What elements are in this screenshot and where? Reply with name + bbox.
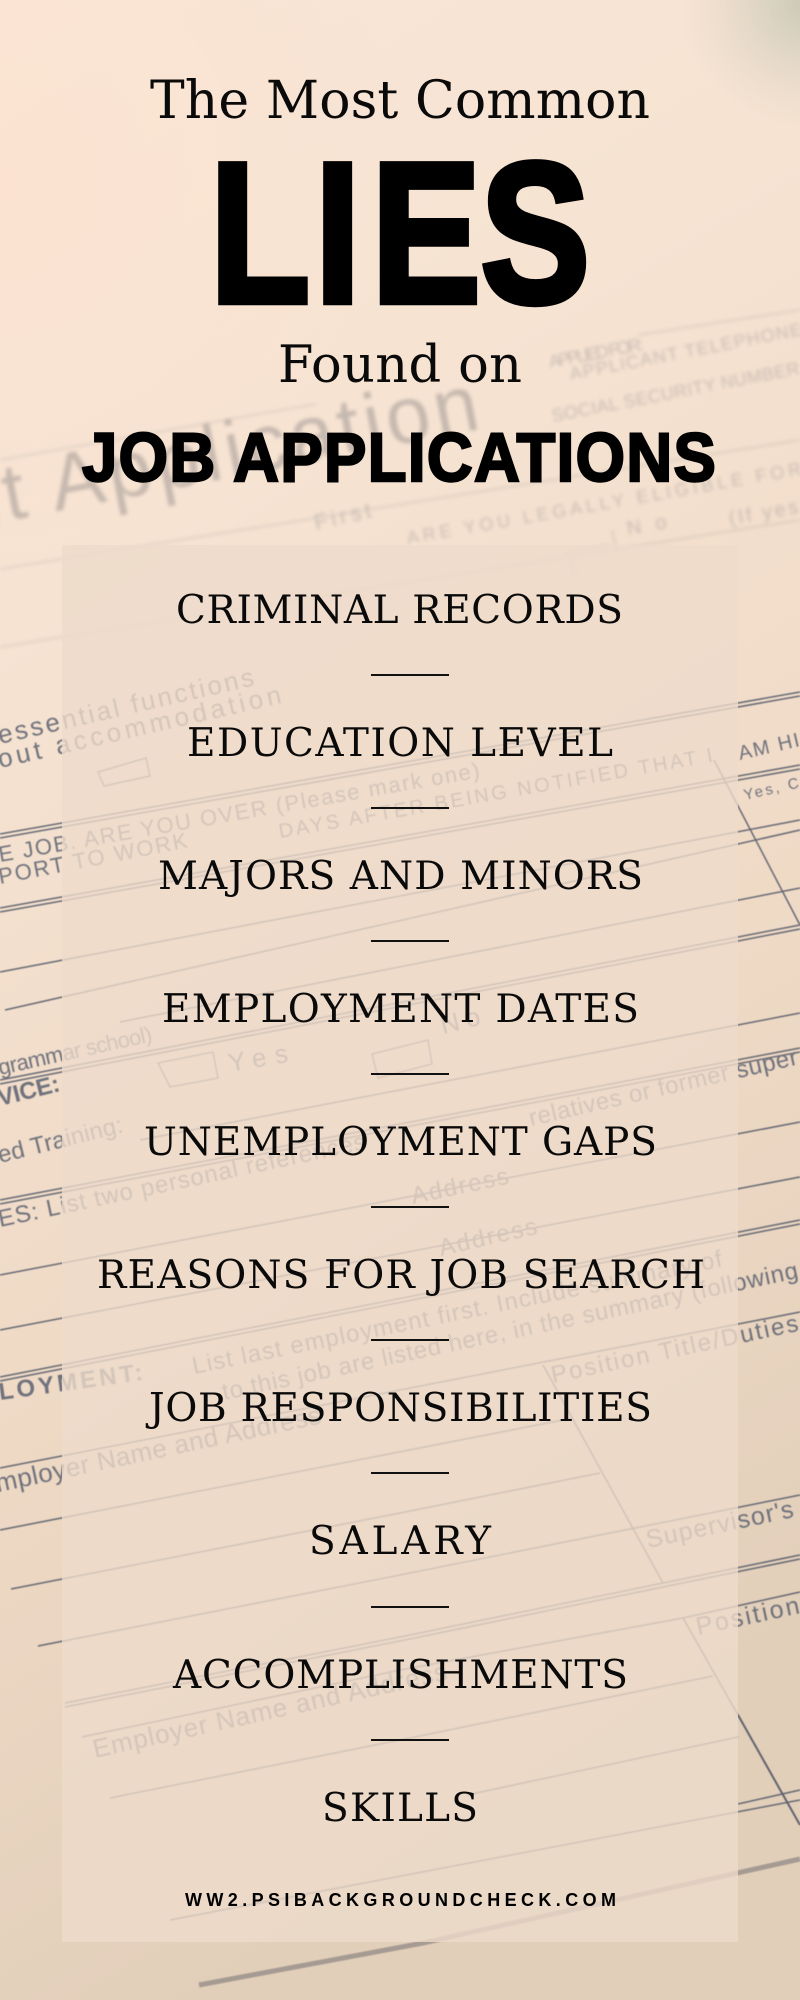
title: Found on: Found on: [278, 336, 522, 395]
title: LIES: LIES: [210, 120, 590, 345]
background: form lines and labels, middle and lower part: relatives or former super: [526, 1044, 800, 1132]
divider 4: [371, 1073, 449, 1075]
background: form lines and labels, middle and lower part: Yes: [226, 1038, 290, 1078]
list item: Salary: SALARY: [309, 1519, 492, 1564]
background: blurred upper part of application form: First: [312, 497, 374, 535]
divider 6: [371, 1339, 449, 1341]
footer: website url: WW2.PSIBACKGROUNDCHECK.COM: [185, 1890, 616, 1910]
background: blurred upper part of application form: ARE YOU LEGALLY ELIGIBLE FOR: [405, 459, 800, 548]
background: form lines and labels, middle and lower part: List last employment first. Include summary of: [190, 1246, 725, 1380]
background: form lines and labels, middle and lower part: ES: List two personal references: [0, 1128, 368, 1233]
divider 9: [371, 1739, 449, 1741]
background: blurred upper part of application form: APPLICANT TELEPHONE: [568, 319, 800, 384]
background: form lines and labels, middle and lower part: Position Title/Duties: [549, 1310, 800, 1389]
background: form lines and labels, middle and lower part: grammar school): [0, 1021, 154, 1080]
background: form lines and labels, middle and lower part: PORT TO WORK: [0, 828, 190, 889]
background: form lines and labels, middle and lower part: Yes, C: [742, 775, 800, 804]
divider 8: [371, 1606, 449, 1608]
divider 2: [371, 807, 449, 809]
background: form lines and labels, middle and lower part: Address: [409, 1163, 511, 1210]
background: form lines and labels, middle and lower part: AM HI: [736, 729, 800, 765]
background: form lines and labels, middle and lower part: Employer Name and Address: [90, 1656, 450, 1764]
divider 5: [371, 1206, 449, 1208]
title: The Most Common: The Most Common: [150, 71, 650, 131]
title: JOB APPLICATIONS: JOB APPLICATIONS: [82, 420, 716, 497]
background: blurred upper part of application form: SOCIAL SECURITY NUMBER: [550, 358, 800, 426]
list item: Accomplishments: ACCOMPLISHMENTS: [172, 1653, 628, 1698]
background: blurred upper part of application form: (If yes: [727, 496, 800, 530]
background: form lines and labels, middle and lower part: LOYMENT:: [0, 1359, 144, 1406]
background: form lines and labels, middle and lower part: out accommodation: [0, 679, 284, 774]
divider 7: [371, 1472, 449, 1474]
background: blurred upper part of application form: [0, 310, 800, 647]
background: form lines and labels, middle and lower part: essential functions: [0, 662, 257, 750]
background: blurred upper part of application form: No: [625, 511, 668, 540]
background: form lines and labels, middle and lower part: DAYS AFTER BEING NOTIFIED THAT I: [277, 745, 714, 843]
divider 3: [371, 940, 449, 942]
list item: Job Responsibilities: JOB RESPONSIBILITIES: [145, 1386, 652, 1431]
panel: list background: [62, 545, 738, 1942]
divider 1: [371, 674, 449, 676]
list item: Criminal Records: CRIMINAL RECORDS: [176, 588, 623, 633]
list item: Skills: SKILLS: [322, 1786, 478, 1831]
list item: Reasons for Job Search: REASONS FOR JOB SEARCH: [97, 1253, 705, 1298]
background: form lines and labels, middle and lower part: Address: [436, 1213, 540, 1262]
background: blurred upper part of application form: APPLIED FOR:: [547, 334, 645, 372]
list item: Employment Dates: EMPLOYMENT DATES: [162, 987, 639, 1032]
list item: Unemployment Gaps: UNEMPLOYMENT GAPS: [144, 1120, 657, 1165]
list item: Majors and Minors: MAJORS AND MINORS: [158, 854, 643, 899]
background: form lines and labels, middle and lower part: E JOB. ARE YOU OVER (Please mark one): [0, 758, 481, 867]
background: form lines and labels, middle and lower part: Position: [693, 1592, 800, 1641]
background: form lines and labels, middle and lower part: to this job are listed here, in the summary (following: [220, 1257, 800, 1406]
background: form lines and labels, middle and lower part: Supervisor's: [643, 1495, 796, 1554]
background: form lines and labels, middle and lower part: No: [437, 1001, 483, 1040]
background: form lines and labels, middle and lower part: [0, 662, 800, 1985]
list item: Education Level: EDUCATION LEVEL: [187, 721, 613, 766]
